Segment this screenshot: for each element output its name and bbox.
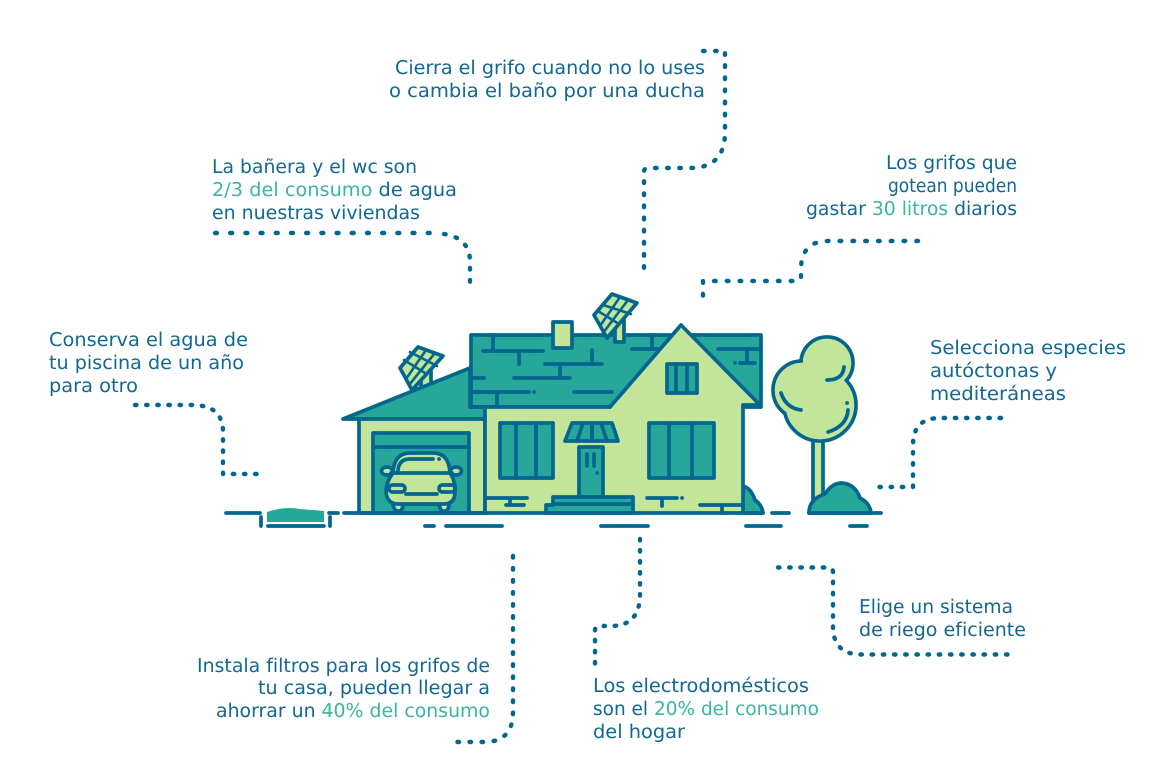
text: appliances: Los electrodomésticos bbox=[593, 675, 809, 697]
text: native species bbox=[930, 337, 1126, 405]
illustration: tree bbox=[773, 337, 856, 504]
text: tap filters: Instala filtros para los grifos de bbox=[197, 655, 490, 677]
text: dripping taps: gastar 30 litros diarios bbox=[806, 198, 1017, 220]
text: pool water: para otro bbox=[49, 375, 138, 397]
text: tap filters bbox=[197, 655, 490, 722]
text: dripping taps: Los grifos que bbox=[886, 152, 1017, 174]
text: irrigation bbox=[859, 596, 1026, 641]
text: bath and wc share: La bañera y el wc son bbox=[212, 156, 417, 178]
text: dripping taps: gotean pueden bbox=[888, 175, 1017, 197]
left window bbox=[500, 423, 553, 478]
dotted connector: bath tip bbox=[215, 233, 470, 282]
small bush behind house bbox=[743, 486, 763, 513]
text: tap filters: tu casa, pueden llegar a bbox=[258, 677, 490, 699]
chimney bbox=[553, 322, 572, 348]
text: bath and wc share: 2/3 del consumo de agua bbox=[212, 179, 457, 201]
dotted connector: dripping tip bbox=[703, 241, 918, 296]
text: irrigation: Elige un sistema bbox=[859, 596, 1013, 618]
text: close the tap bbox=[389, 57, 705, 102]
text: appliances: del hogar bbox=[593, 721, 685, 743]
door bbox=[579, 447, 603, 497]
dotted connector: tap tip bbox=[644, 51, 725, 268]
text: native species: mediteráneas bbox=[930, 383, 1066, 405]
text: close the tap: o cambia el baño por una ducha bbox=[389, 80, 705, 102]
garage door bbox=[373, 433, 469, 513]
roof bricks bbox=[471, 335, 761, 407]
right window bbox=[649, 423, 714, 478]
main roof bbox=[471, 335, 761, 407]
dotted connector: pool tip bbox=[135, 405, 257, 474]
solar panel left bbox=[400, 347, 443, 395]
wall bricks bbox=[487, 498, 743, 513]
dotted connector: filter tip bbox=[457, 556, 513, 742]
awning bbox=[565, 423, 618, 441]
text: irrigation: de riego eficiente bbox=[859, 619, 1026, 641]
text: appliances bbox=[593, 675, 819, 743]
ground lines bbox=[226, 513, 881, 526]
garage wall bbox=[359, 419, 485, 513]
dotted connector: species tip bbox=[879, 418, 1001, 487]
garage roof bbox=[343, 368, 485, 419]
illustration: house bbox=[343, 294, 763, 513]
text: tap filters: ahorrar un 40% del consumo bbox=[216, 700, 490, 722]
text: close the tap: Cierra el grifo cuando no lo uses bbox=[395, 57, 705, 79]
text: bath and wc share: en nuestras viviendas bbox=[212, 202, 420, 224]
text: native species: autóctonas y bbox=[930, 360, 1057, 382]
text: pool water: tu piscina de un año bbox=[49, 352, 244, 374]
dotted connector: irrigation tip bbox=[778, 568, 1008, 654]
text: pool water bbox=[49, 329, 248, 397]
illustration: pool bbox=[261, 508, 330, 526]
car bbox=[382, 453, 462, 511]
text: bath and wc share bbox=[212, 156, 457, 224]
text: appliances: son el 20% del consumo bbox=[593, 698, 819, 720]
text: dripping taps bbox=[806, 152, 1017, 220]
solar panel right bbox=[594, 294, 637, 342]
illustration: bush bbox=[809, 483, 871, 513]
text: pool water: Conserva el agua de bbox=[49, 329, 248, 351]
entrance steps bbox=[546, 497, 633, 513]
attic window bbox=[667, 364, 697, 393]
text: native species: Selecciona especies bbox=[930, 337, 1126, 359]
house body bbox=[485, 325, 760, 513]
dotted connector: appliance tip bbox=[595, 539, 640, 664]
